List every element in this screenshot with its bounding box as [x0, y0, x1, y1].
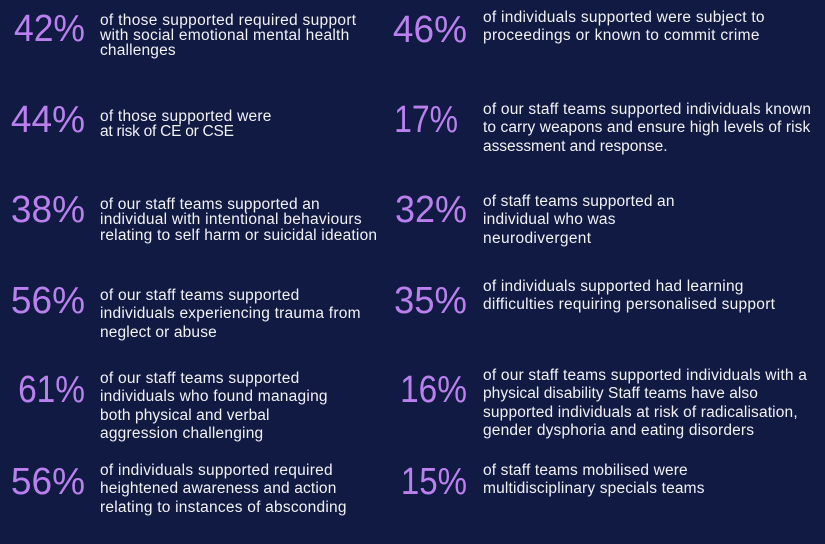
- text: 32 percent description: [483, 193, 675, 247]
- text: 15 percent description: [483, 462, 705, 497]
- text: 15 percent description: of staff teams mobilised were: [483, 462, 688, 479]
- text: 32 percent description: individual who was: [483, 211, 616, 228]
- stat: 17 percent: 17%: [394, 99, 458, 141]
- text: 35 percent description: difficulties requiring personalised support: [483, 296, 775, 313]
- stat: 46 percent: 46%: [393, 9, 467, 51]
- text: 35 percent description: of individuals supported had learning: [483, 278, 744, 295]
- text: 56 percent description: of our staff teams supported: [100, 287, 299, 304]
- text: 56 percent absconding description: heightened awareness and action: [100, 480, 336, 497]
- text: 42 percent description: of those supported required support: [100, 12, 356, 29]
- text: 61 percent description: [100, 370, 328, 442]
- text: 15 percent description: multidisciplinary specials teams: [483, 480, 705, 497]
- text: 56 percent description: neglect or abuse: [100, 324, 217, 341]
- text: 61 percent description: individuals who found managing: [100, 388, 328, 405]
- text: 17 percent description: to carry weapons and ensure high levels of risk: [483, 119, 810, 136]
- text: 16 percent description: [483, 367, 807, 439]
- text: 56 percent absconding description: of individuals supported required: [100, 462, 333, 479]
- text: 61 percent description: aggression challenging: [100, 425, 263, 442]
- text: 38 percent description: [100, 196, 377, 244]
- text: 56 percent description: individuals experiencing trauma from: [100, 305, 361, 322]
- text: 46 percent description: proceedings or known to commit crime: [483, 27, 760, 44]
- stat: 42 percent: 42%: [14, 8, 85, 50]
- text: 35 percent description: [483, 278, 775, 313]
- text: 16 percent description: supported individuals at risk of radicalisation,: [483, 404, 798, 421]
- text: 56 percent absconding description: relating to instances of absconding: [100, 499, 347, 516]
- text: 38 percent description: relating to self harm or suicidal ideation: [100, 227, 377, 244]
- stat: 15 percent: 15%: [401, 461, 467, 503]
- text: 44 percent description: [100, 108, 272, 140]
- text: 44 percent description: of those supported were: [100, 108, 272, 125]
- text: 46 percent description: of individuals supported were subject to: [483, 9, 765, 26]
- stat: 56 percent: 56%: [11, 280, 85, 322]
- text: 17 percent description: [483, 101, 811, 155]
- stat: 32 percent: 32%: [395, 189, 467, 231]
- text: 17 percent description: assessment and response.: [483, 138, 668, 155]
- text: 56 percent absconding description: [100, 462, 347, 516]
- stat: 35 percent: 35%: [394, 280, 467, 322]
- stat: 38 percent: 38%: [11, 189, 85, 231]
- text: 61 percent description: both physical and verbal: [100, 407, 270, 424]
- text: 17 percent description: of our staff teams supported individuals known: [483, 101, 811, 118]
- stat: 16 percent: 16%: [400, 369, 467, 411]
- text: 38 percent description: individual with intentional behaviours: [100, 211, 362, 228]
- text: 38 percent description: of our staff teams supported an: [100, 196, 320, 213]
- stat: 61 percent: 61%: [18, 369, 85, 411]
- text: 44 percent description: at risk of CE or CSE: [100, 123, 234, 140]
- text: 42 percent description: [100, 12, 356, 59]
- text: 46 percent description: [483, 9, 765, 44]
- stat: 44 percent: 44%: [11, 99, 85, 141]
- text: 16 percent description: physical disability Staff teams have also: [483, 385, 758, 402]
- text: 32 percent description: neurodivergent: [483, 230, 591, 247]
- text: 32 percent description: of staff teams supported an: [483, 193, 675, 210]
- text: 42 percent description: with social emotional mental health: [100, 27, 349, 44]
- text: 16 percent description: gender dysphoria and eating disorders: [483, 422, 754, 439]
- text: 42 percent description: challenges: [100, 42, 176, 59]
- text: 16 percent description: of our staff teams supported individuals with a: [483, 367, 807, 384]
- stat: 56 percent absconding: 56%: [11, 461, 85, 503]
- text: 61 percent description: of our staff teams supported: [100, 370, 299, 387]
- text: 56 percent description: [100, 287, 361, 341]
